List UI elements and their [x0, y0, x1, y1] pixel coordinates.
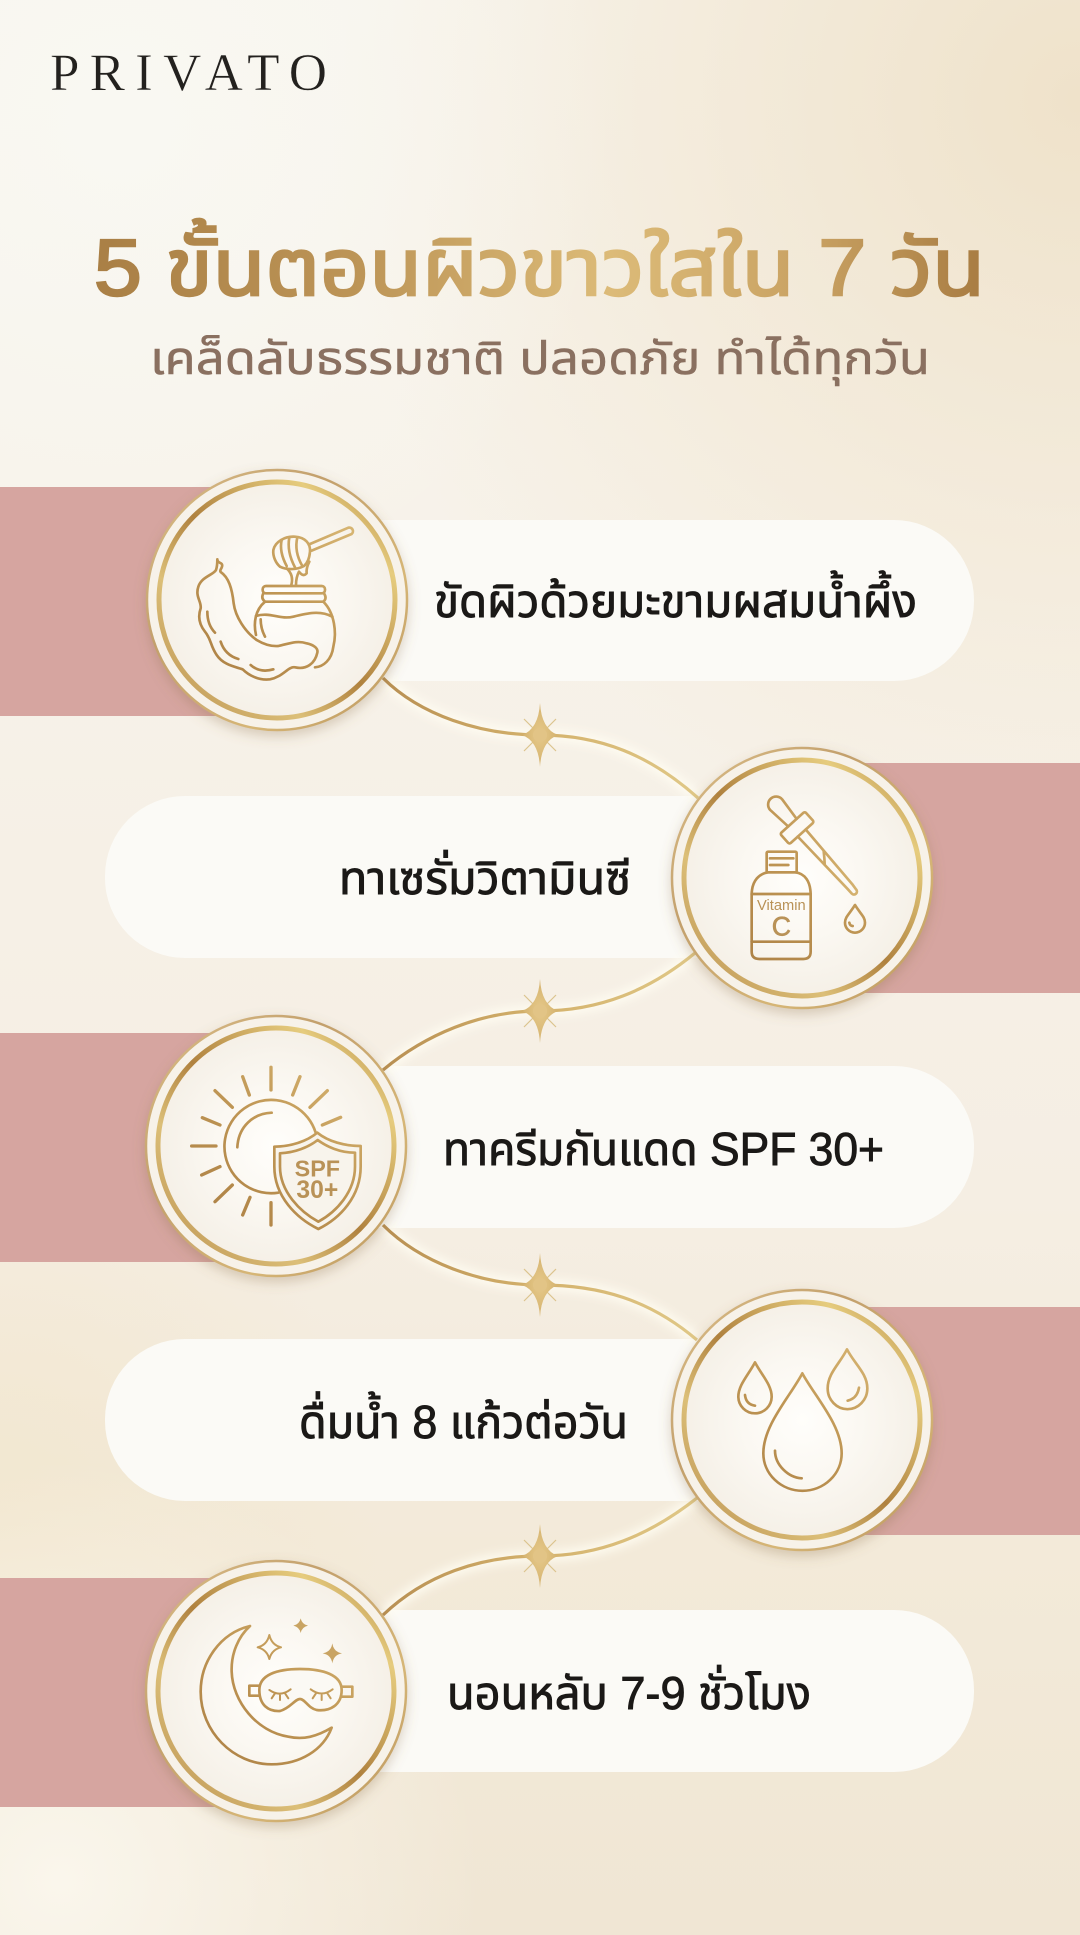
icon: vitamin C dropper bottle: C [772, 911, 791, 941]
medallion 4 [672, 1290, 932, 1550]
pill 2 [105, 796, 779, 958]
step 3 text: ทาครีมกันแดด SPF 30+ [443, 1123, 884, 1175]
medallion 5 [146, 1561, 406, 1821]
pink band 3 [0, 1033, 240, 1262]
medallion 3 [146, 1016, 406, 1276]
icon: vitamin C dropper bottle [752, 787, 869, 959]
connector 3 with star [383, 1225, 697, 1340]
pill 4 [105, 1339, 779, 1501]
icon: sun and SPF shield: 30+ [296, 1177, 338, 1204]
step 4 text: ดื่มน้ำ 8 แก้วต่อวัน [299, 1391, 628, 1448]
icon: water drops [738, 1349, 867, 1491]
connector 2 with star [383, 953, 695, 1070]
pill 5 [300, 1610, 974, 1772]
pink band 1 [0, 487, 240, 716]
pill 1 [300, 520, 974, 681]
icon: tamarind and honey jar [197, 528, 353, 680]
icon: sun and SPF shield: SPF [295, 1155, 340, 1181]
title: 5 ขั้นตอนผิวขาวใสใน 7 วัน [94, 219, 985, 312]
icon: moon, stars and sleep mask [201, 1618, 352, 1764]
connector 1 with star [383, 678, 698, 798]
step 1 text: ขัดผิวด้วยมะขามผสมน้ำผึ้ง [434, 570, 917, 627]
pink band 2 [840, 763, 1080, 993]
connector 4 with star [383, 1498, 697, 1615]
step 5 text: นอนหลับ 7-9 ชั่วโมง [447, 1665, 811, 1719]
step 2 text: ทาเซรั่มวิตามินซี [339, 850, 631, 904]
logo: PRIVATO: PRIVATO [50, 44, 327, 102]
medallion 2 [672, 748, 932, 1008]
pink band 4 [840, 1307, 1080, 1535]
pink band 5 [0, 1578, 240, 1807]
medallion 1 [147, 470, 407, 730]
icon: vitamin C dropper bottle: Vitamin [757, 898, 806, 914]
icon: sun and SPF shield [192, 1067, 361, 1229]
subtitle: เคล็ดลับธรรมชาติ ปลอดภัย ทำได้ทุกวัน [150, 332, 930, 386]
pill 3 [300, 1066, 974, 1228]
